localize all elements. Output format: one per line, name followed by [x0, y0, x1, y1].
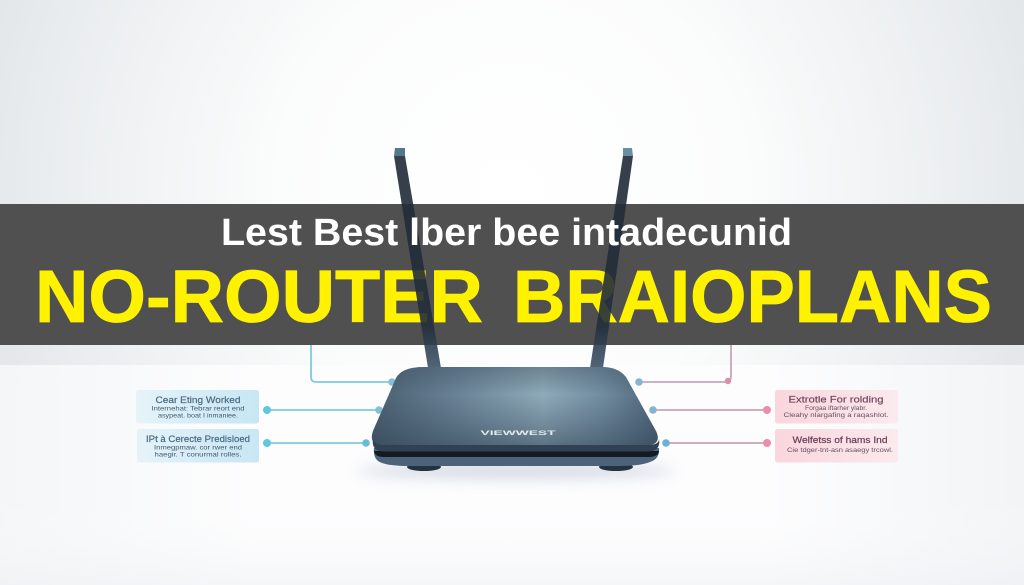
title: yellow headline: BRAIOPLANS — [513, 255, 992, 338]
panel: right callout 2 — [775, 429, 898, 462]
body: left callout 2: haegir. T conurmal rolles. — [154, 452, 242, 458]
body: right callout 1 — [784, 405, 889, 419]
body: left callout 1: asypeat. boat I inmaniee. — [158, 412, 238, 420]
router feet — [407, 463, 633, 471]
router brand label: VIEWWEST — [480, 430, 556, 437]
left connector lines — [267, 345, 392, 443]
title: yellow headline: NO-ROUTER — [35, 255, 483, 338]
left antenna — [394, 148, 441, 368]
background: floor — [0, 365, 1024, 585]
icon: router — [372, 148, 659, 471]
heading: left callout 2: IPt à Cerecte Predisloed — [146, 434, 250, 445]
router front lip — [373, 439, 659, 452]
body: left callout 2: Inmegpmaw. cor rwer end — [154, 444, 243, 452]
title: white heading line: Lest Best lber bee intadecunid — [221, 212, 792, 254]
heading: right callout 2: Welfetss of hams Ind — [792, 435, 888, 446]
panel: right callout 1 — [775, 390, 898, 424]
title: yellow headline — [35, 255, 992, 338]
body: left callout 2 — [154, 444, 243, 458]
router shadow — [356, 463, 676, 479]
right antenna — [590, 148, 633, 368]
heading: left callout 1: Cear Eting Worked — [156, 395, 240, 406]
panel: left callout 1 — [136, 390, 259, 424]
router top surface — [372, 367, 658, 446]
body: left callout 1 — [152, 406, 245, 420]
body: left callout 1: Internehat: Tebrar reort end — [152, 406, 245, 412]
body: right callout 1: Forgaa iftarher ylabr. — [805, 405, 867, 412]
router base — [374, 448, 659, 466]
body: right callout 2: Cie tdger-tnt-asn asaegy trcowl. — [787, 447, 893, 454]
router slot — [374, 451, 659, 457]
heading: right callout 1: Extrotle For rolding — [788, 394, 884, 406]
panel: left callout 2 — [137, 429, 259, 462]
right connector lines — [639, 345, 767, 443]
banner: dark title band — [0, 204, 1024, 345]
connector dots — [263, 378, 771, 447]
body: right callout 1: Cleahy nlargafing a raqashlot. — [784, 412, 889, 419]
